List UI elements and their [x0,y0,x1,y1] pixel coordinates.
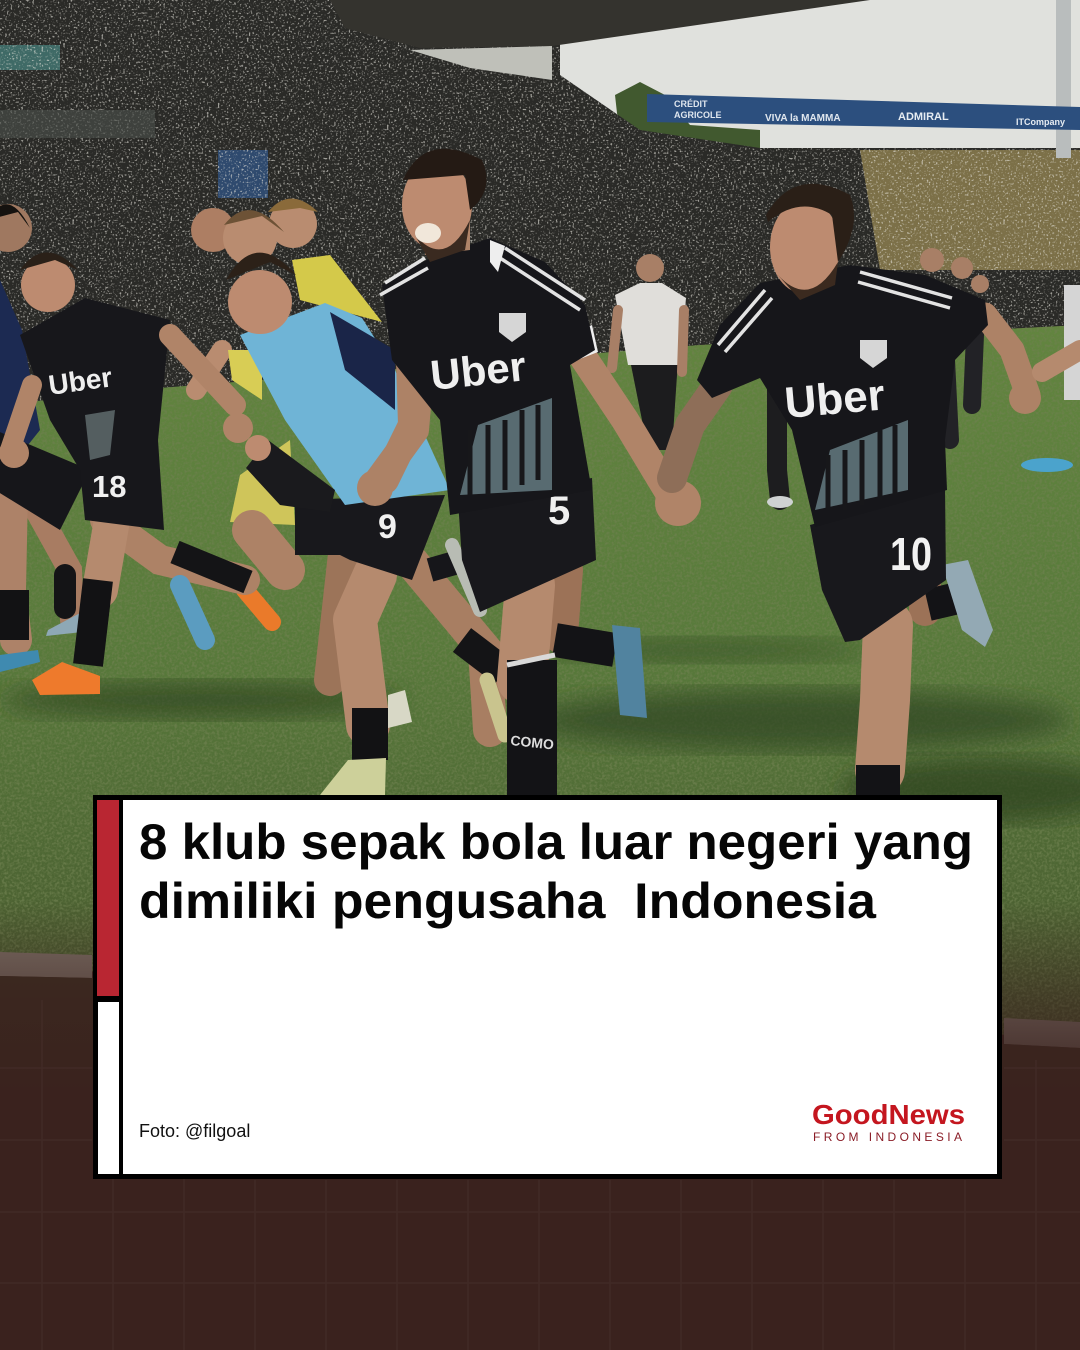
shorts [458,478,596,612]
sponsor banner: ITCompany [1016,117,1065,127]
referee in white shirt [612,254,686,450]
title card [96,798,1000,1176]
heading [139,814,973,929]
bald and glasses players [191,208,284,400]
player number 9 in blue bib [226,253,505,795]
photo credit: Foto: @filgoal [139,1121,250,1141]
sky [540,0,1080,160]
shirt [382,238,595,515]
staff near right player [767,248,1072,508]
player at edge in navy [0,204,90,672]
grass [0,325,1080,1040]
sponsor: Uber [783,370,887,428]
trees behind stand [615,82,760,150]
left stand railing [0,110,155,138]
track band [0,952,92,978]
head [785,240,835,280]
logo: GoodNews from Indonesia [812,1099,965,1144]
blue bag on grass [1021,458,1073,472]
head [425,220,470,255]
background people [612,248,1073,508]
lead leg [880,625,888,770]
player number 10, right [672,184,1080,795]
far-left group of players [0,198,382,695]
sponsor banner: AGRICOLE [674,110,722,120]
trailing leg and boot [909,575,941,610]
crowd [0,0,1080,410]
crest [860,340,887,368]
shirt [697,265,988,527]
player shadows [0,682,400,718]
crest [499,313,526,342]
heading: dimiliki pengusaha Indonesia [139,873,877,929]
logo: GoodNews from Indonesia: FROM INDONESIA [813,1130,962,1144]
arms [672,385,718,478]
sponsor: Uber [428,342,528,399]
shorts [810,488,946,642]
lead leg [522,585,530,680]
card body [96,798,1000,1176]
player number 10, right: 10 [890,528,932,580]
player number 18: 18 [92,469,126,504]
goalkeeper in yellow [230,198,382,622]
side strip [97,798,123,1176]
sponsor banner: VIVA la MAMMA [765,113,841,124]
fade [0,900,1080,1100]
player number 5, centre: 5 [548,489,570,533]
heading: 8 klub sepak bola luar negeri yang [139,814,973,870]
player number 18: Uber [47,361,114,401]
background photo: stadium and pitch [0,0,1080,1048]
dark track below band [0,976,1080,1350]
logo: GoodNews from Indonesia: GoodNews [812,1099,965,1130]
arms [385,360,412,480]
player number 9 in blue bib: 9 [378,508,397,546]
player number 18 [0,252,253,695]
player number 5, centre: COMO [510,732,555,753]
sponsor banner: ADMIRAL [898,111,949,123]
floodlight pole [1056,0,1071,158]
sponsor banner [647,94,1080,130]
sponsor banner: CRÉDIT [674,99,708,109]
background grid [0,1000,1080,1350]
stadium roof [330,0,870,48]
player number 5, centre [380,149,701,795]
trailing leg [560,570,565,635]
